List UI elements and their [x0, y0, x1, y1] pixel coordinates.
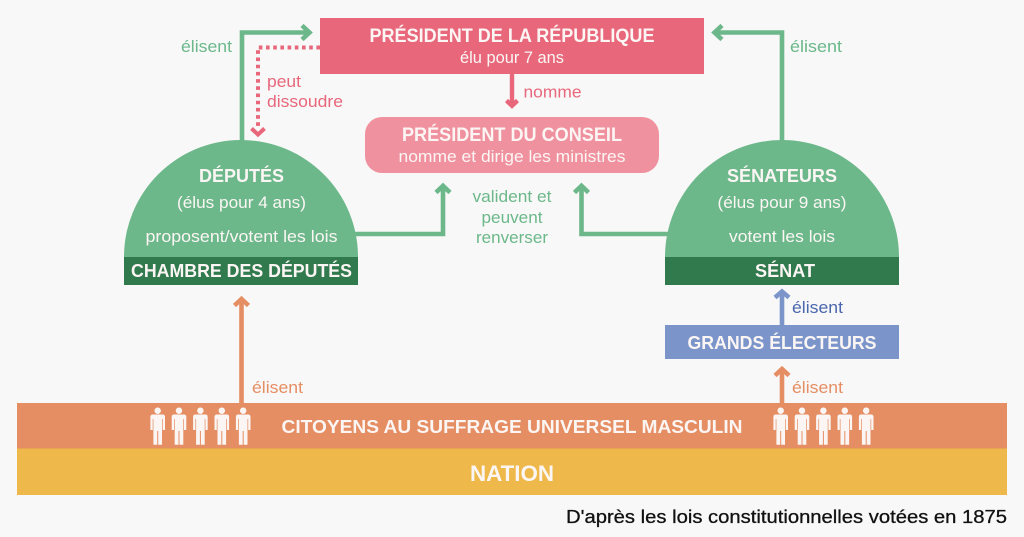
panel: président de la république: PRÉSIDENT DE LA RÉPUBLIQUE: [370, 25, 654, 47]
label: élisent (sénateurs): élisent: [790, 37, 842, 56]
panel: grands électeurs: GRANDS ÉLECTEURS: [688, 332, 876, 353]
label: valident et peuvent renverser: valident et: [472, 187, 552, 206]
text: élus pour 4 ans: (élus pour 4 ans): [177, 193, 306, 212]
label: élisent (députés): élisent: [181, 37, 232, 56]
arrow: citoyens élisent les députés: [234, 299, 248, 404]
dome: députés: [124, 140, 358, 257]
label: peut dissoudre: peut: [267, 72, 301, 91]
panel: président de la république: [320, 18, 704, 74]
label: peut dissoudre: dissoudre: [267, 92, 343, 111]
dome: sénateurs: [665, 140, 899, 257]
source note: D'après les lois constitutionnelles votées en 1875: [566, 506, 1007, 527]
arrow: sénat vers président du conseil: [574, 186, 668, 234]
arrow: peut dissoudre (dotted): [252, 48, 320, 134]
heading: députés: DÉPUTÉS: [199, 165, 284, 186]
band: sénat: [665, 257, 899, 285]
arrow: grands électeurs élisent le sénat: [775, 292, 789, 325]
panel: président de la république: élu pour 7 ans: [460, 49, 564, 67]
panel: citoyens au suffrage universel masculin: CITOYENS AU SUFFRAGE UNIVERSEL MASCULIN: [282, 416, 742, 437]
text: votent les lois: votent les lois: [729, 227, 835, 246]
text: proposent/votent les lois: proposent/votent les lois: [146, 227, 338, 246]
label: élisent (citoyens, gauche): élisent: [252, 378, 303, 397]
panel: citoyens au suffrage universel masculin: [17, 403, 1007, 448]
arrow: chambre vers président du conseil: [355, 186, 450, 234]
icons: citoyens droite: [773, 408, 874, 445]
label: élisent (citoyens, droite): élisent: [792, 378, 843, 397]
icons: citoyens gauche: [150, 408, 250, 445]
panel: chambre des députés: [124, 140, 358, 285]
band label: SÉNAT: [755, 260, 815, 281]
label: valident et peuvent renverser: peuvent: [482, 208, 543, 227]
band label: CHAMBRE DES DÉPUTÉS: [131, 260, 352, 281]
band: chambre des députés: [124, 257, 358, 285]
label: valident et peuvent renverser: renverser: [476, 228, 548, 247]
label: valident et peuvent renverser: [472, 187, 552, 247]
panel: président du conseil: nomme et dirige les ministres: [398, 147, 626, 166]
arrow: citoyens élisent les grands électeurs: [775, 369, 789, 404]
label: élisent (grands électeurs): élisent: [792, 298, 843, 317]
heading: sénateurs: SÉNATEURS: [727, 165, 837, 186]
label: peut dissoudre: [267, 72, 343, 111]
panel: président du conseil: [365, 117, 659, 173]
arrow: sénateurs élisent le président: [714, 26, 782, 142]
text: élus pour 9 ans: (élus pour 9 ans): [718, 193, 846, 212]
label: nomme: nomme: [524, 82, 582, 102]
panel: nation: NATION: [470, 461, 554, 486]
panel: grands électeurs: [665, 325, 899, 359]
panel: nation: [17, 448, 1007, 495]
panel: président du conseil: PRÉSIDENT DU CONSEIL: [402, 124, 622, 146]
arrow: députés élisent le président: [242, 26, 310, 142]
arrow: nomme: [506, 74, 518, 106]
panel: sénat: [665, 140, 899, 285]
